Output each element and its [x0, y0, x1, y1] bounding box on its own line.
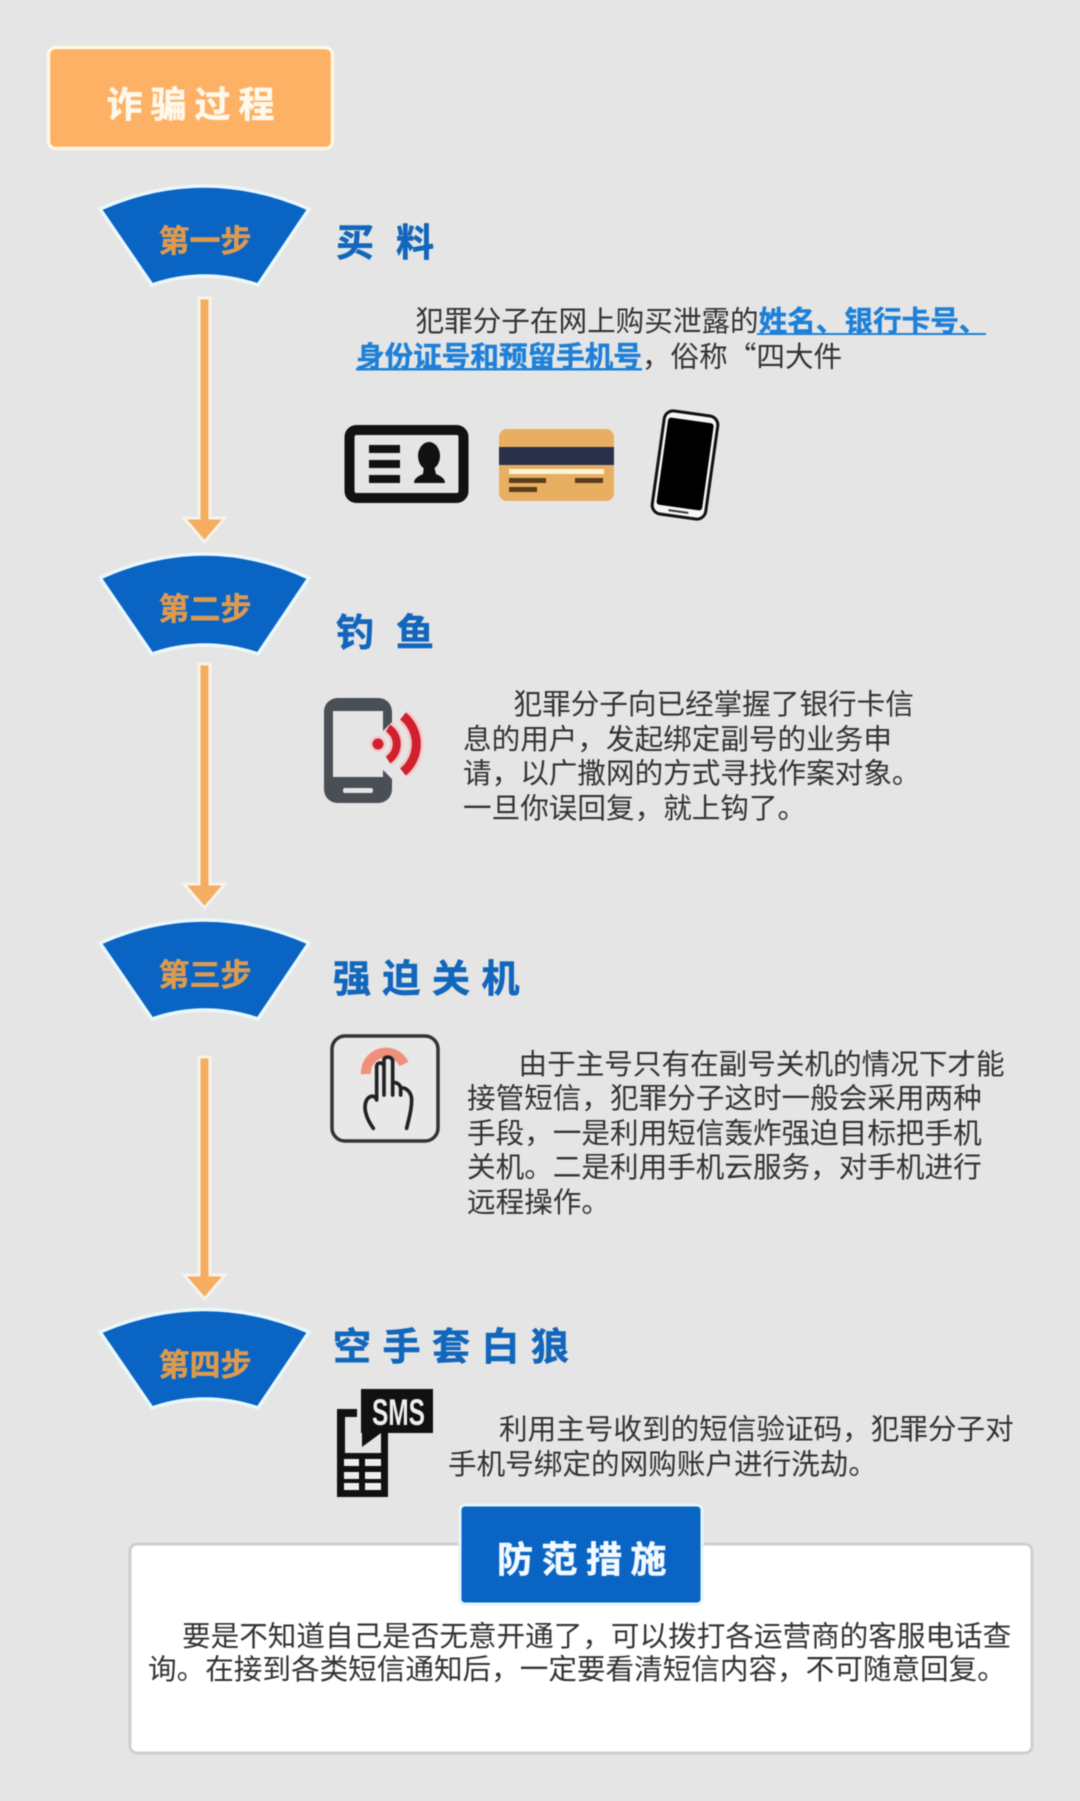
- prevention heading badge: 防范措施: [460, 1505, 702, 1604]
- text: step 3 description: 接管短信，犯罪分子这时一般会采用两种: [467, 1083, 982, 1115]
- step 2 badge: 第二步: [100, 554, 309, 654]
- text: step 2 description: [463, 689, 921, 825]
- panel: prevention measures: [130, 1505, 1032, 1753]
- text: prevention description: [148, 1621, 1011, 1686]
- arrow 3: [184, 1057, 225, 1299]
- heading: 买料: 买料: [336, 223, 456, 265]
- text: step 2 description: 息的用户，发起绑定副号的业务申: [463, 724, 892, 756]
- text: step 4 description: 利用主号收到的短信验证码，犯罪分子对: [499, 1414, 1014, 1446]
- icon: smartphone: [651, 410, 719, 520]
- arrow 2: [184, 664, 225, 908]
- icon: SMS phone: [337, 1389, 433, 1497]
- text: step 3 description: 关机。二是利用手机云服务，对手机进行: [467, 1152, 982, 1184]
- step 4 badge: 第四步: [100, 1310, 309, 1408]
- icon: ID card: [350, 430, 464, 498]
- step 1 badge: 第一步: 第一步: [158, 224, 252, 259]
- text: step 1 description: 身份证号和预留手机号，俗称“四大件: [356, 334, 842, 376]
- step 1 badge: 第一步: [100, 186, 309, 285]
- text: step 2 description: 一旦你误回复，就上钩了。: [463, 793, 806, 825]
- text: step 3 description: 手段，一是利用短信轰炸强迫目标把手机: [467, 1118, 982, 1150]
- title badge: 诈骗过程: [48, 48, 332, 148]
- title badge: 诈骗过程: 诈骗过程: [106, 84, 283, 125]
- text: step 2 description: 犯罪分子向已经掌握了银行卡信: [514, 689, 914, 721]
- text: step 2 description: 请，以广撒网的方式寻找作案对象。: [463, 758, 921, 790]
- text: prevention description: 要是不知道自己是否无意开通了，可以拨打各运营商的客服电话查: [182, 1621, 1011, 1653]
- text: step 4 description: [448, 1414, 1014, 1481]
- icon: bank card: [499, 429, 614, 501]
- step 3 badge: 第三步: 第三步: [158, 958, 252, 993]
- heading: 强迫关机: 强迫关机: [333, 959, 531, 1001]
- heading: 钓鱼: 钓鱼: [336, 613, 456, 655]
- heading: 空手套白狼: 空手套白狼: [333, 1327, 581, 1369]
- arrow 1: [184, 298, 225, 542]
- text: step 1 description: [356, 306, 987, 376]
- step 4 badge: 第四步: 第四步: [158, 1348, 252, 1383]
- prevention heading badge: 防范措施: 防范措施: [497, 1539, 675, 1580]
- step 2 badge: 第二步: 第二步: [158, 592, 252, 627]
- text: prevention description: 询。在接到各类短信通知后，一定要看清短信内容，不可随意回复。: [148, 1654, 1006, 1686]
- text: step 4 description: 手机号绑定的网购账户进行洗劫。: [448, 1449, 877, 1481]
- text: step 3 description: 远程操作。: [467, 1187, 610, 1219]
- icon: SMS phone: SMS: [372, 1392, 425, 1433]
- icon: phone with signal: [324, 698, 416, 803]
- text: step 1 description: 犯罪分子在网上购买泄露的姓名、银行卡号、: [416, 306, 987, 338]
- icon: touch gesture: [332, 1036, 438, 1141]
- text: step 3 description: 由于主号只有在副号关机的情况下才能: [518, 1049, 1005, 1081]
- text: step 3 description: [467, 1049, 1005, 1219]
- step 3 badge: 第三步: [100, 920, 309, 1019]
